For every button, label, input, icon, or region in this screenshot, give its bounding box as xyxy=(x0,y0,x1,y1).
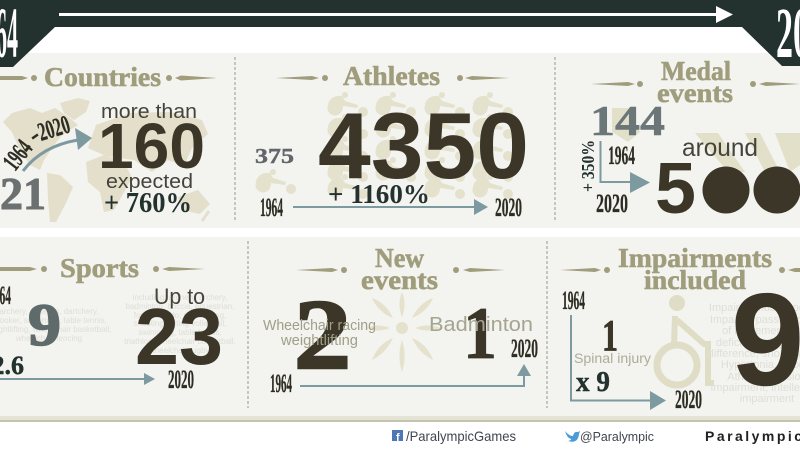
value 500: 0 xyxy=(769,175,785,206)
ghost list 2020 sports: including: archery, archery, xyxy=(133,293,227,302)
more than: more than xyxy=(101,101,197,123)
ghost list 2020 sports: football, judo, powerlifting, xyxy=(134,311,226,320)
title: Medal events: Medal xyxy=(661,56,731,86)
value 21: 21 xyxy=(0,168,46,219)
elbow arrow xyxy=(571,315,666,410)
curved years label: - xyxy=(22,120,46,149)
title: Impairments included xyxy=(618,243,772,295)
title: Medal events xyxy=(657,56,733,108)
wheelchair racer icons xyxy=(256,92,513,199)
ghost list 2020 sports: swimming, table tennis, xyxy=(138,328,222,337)
ghost list 1964 sports: wheelchair fencing xyxy=(15,334,82,343)
facebook: f xyxy=(396,432,400,444)
panel: sports xyxy=(0,253,236,394)
title ornaments xyxy=(0,75,217,81)
value 4350: 4350 xyxy=(318,93,529,198)
header banner xyxy=(0,0,800,73)
curved years label xyxy=(0,110,73,176)
ghost list 1964 sports xyxy=(0,307,111,343)
brand: Paralympic xyxy=(705,428,800,444)
ghost list 2020 sports: shooting, sitting volleyball, xyxy=(134,319,226,328)
wheelchair icon xyxy=(657,295,714,385)
value 23: 23 xyxy=(135,292,223,381)
value 144: 144 xyxy=(590,99,665,145)
burst icon xyxy=(367,292,441,372)
panel: impairments xyxy=(560,243,800,414)
title: Impairments included: Impairments xyxy=(618,243,772,273)
title: Medal events: events xyxy=(657,78,733,108)
title: New events: New xyxy=(375,243,424,273)
+350%: + 350% xyxy=(578,140,598,192)
title: Sports: Sports xyxy=(60,253,139,283)
title: Athletes: Athletes xyxy=(343,61,440,91)
curved years label: 2020 xyxy=(34,110,73,147)
around: around xyxy=(682,134,758,162)
ghost list 2020 sports: triathlon, wheelchair basketball, xyxy=(124,337,236,346)
value 160: 160 xyxy=(98,110,205,182)
year 2020: 2020 xyxy=(596,189,628,218)
arrow 1964 to 2020 xyxy=(23,128,92,171)
value 2: 2 xyxy=(294,279,351,390)
value 500 xyxy=(655,149,800,229)
ghost list 2020 sports: badminton, boccia, equestrian, xyxy=(126,302,234,311)
ghost list 2020 sports: wheelchair rugby, xyxy=(148,346,211,355)
title ornaments xyxy=(276,75,510,81)
title ornaments xyxy=(591,81,800,87)
year 1964: 1964 xyxy=(608,141,635,170)
elbow arrow xyxy=(600,141,650,193)
title ornaments xyxy=(296,267,505,273)
title: New events: events xyxy=(361,265,438,295)
+760%: + 760% xyxy=(104,187,192,219)
bottom band xyxy=(0,416,800,422)
ghost list 1964 sports: archery, athletics, dartchery, xyxy=(0,307,99,316)
+1160%: + 1160% xyxy=(328,179,430,209)
facebook: /ParalympicGames xyxy=(406,428,516,444)
value 375: 375 xyxy=(255,144,294,168)
arrow xyxy=(300,364,531,386)
value 500: 5 xyxy=(655,149,696,229)
value 1: 1 xyxy=(463,293,497,375)
background laurel shapes xyxy=(612,108,800,172)
ghost list impairments: impairment xyxy=(740,393,794,405)
bottom panels background xyxy=(0,237,800,416)
footer xyxy=(392,428,800,444)
spinal injury: Spinal injury xyxy=(574,350,651,366)
panel: impairments: 1964 xyxy=(562,286,585,315)
panel: athletes: 1964 xyxy=(260,193,283,222)
panel: new events: 1964 xyxy=(270,369,292,398)
ghost list impairments xyxy=(708,302,800,405)
year 2020: 2020 xyxy=(495,193,522,222)
title ornaments xyxy=(560,267,800,273)
wheelchair racing weightlifting xyxy=(263,317,376,349)
badminton: Badminton xyxy=(429,314,533,336)
top panels background xyxy=(0,53,800,228)
expected: expected xyxy=(106,171,193,193)
title: Countries: Countries xyxy=(44,62,161,92)
panel: countries xyxy=(0,62,217,222)
x9: x 9 xyxy=(576,367,610,398)
value 500: 0 xyxy=(718,175,734,206)
title: New events xyxy=(361,243,438,295)
year 2020: 2020 xyxy=(675,385,702,414)
panel: new events xyxy=(263,243,538,398)
ghost list 2020 sports xyxy=(124,293,236,355)
year 2020: 2020 xyxy=(168,365,194,394)
twitter: @Paralympic xyxy=(580,429,654,444)
wheelchair racing weightlifting: Wheelchair racing xyxy=(263,317,376,334)
panel: medal events xyxy=(578,56,800,229)
header arrow xyxy=(59,6,733,23)
world map xyxy=(3,98,210,222)
value 9: 9 xyxy=(28,292,61,358)
title: Impairments included: included xyxy=(644,265,746,295)
up to: Up to xyxy=(154,284,205,309)
title ornaments xyxy=(0,266,205,272)
arrow xyxy=(0,373,155,385)
year 2020: 2020 xyxy=(511,334,538,363)
value 1: 1 xyxy=(602,311,618,360)
panel: athletes xyxy=(255,61,529,222)
arrow xyxy=(293,199,488,215)
wheelchair racing weightlifting: weightlifting xyxy=(280,332,358,349)
